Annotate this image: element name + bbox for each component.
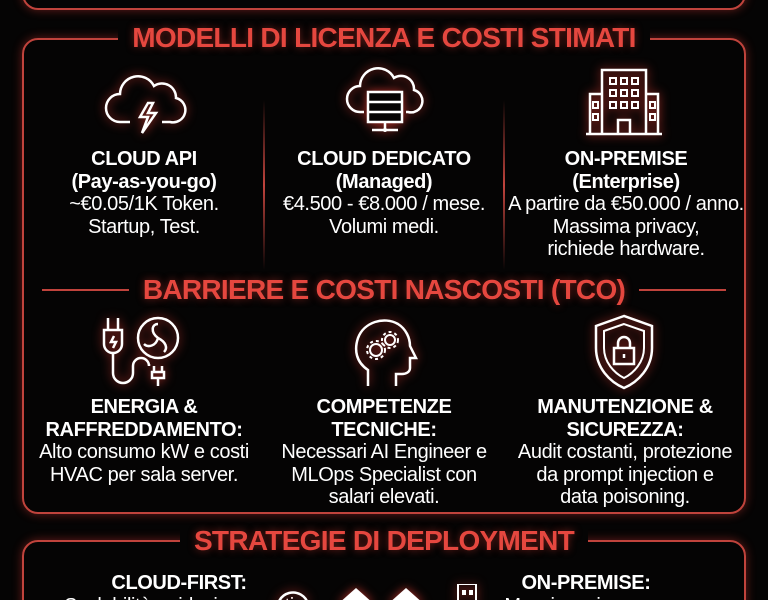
text: energia: ENERGIA & [91,396,197,418]
text: competenze: COMPETENZE [317,396,451,418]
text: on-premise strategy: ON-PREMISE: [522,572,650,594]
text: manutenzione: data poisoning. [560,486,690,508]
text: cloud dedicato: CLOUD DEDICATO [297,148,471,170]
text: cloud api: ~€0.05/1K Token. [69,193,219,215]
text: cloud dedicato: (Managed) [336,170,432,192]
text: manutenzione: da prompt injection e [536,464,714,486]
heading: strategie: STRATEGIE DI DEPLOYMENT [194,525,574,556]
text: competenze: TECNICHE: [331,418,437,440]
text: on-premise: Massima privacy, [553,216,699,238]
icon: deployment arrows [272,579,484,600]
panel: licensing and barriers [22,38,746,514]
text: cloud api: CLOUD API [91,148,197,170]
text: energia: RAFFREDDAMENTO: [46,418,242,440]
text: manutenzione: MANUTENZIONE & [537,396,713,418]
text: cloud dedicato: Volumi medi. [329,216,439,238]
text: energia: Alto consumo kW e costi [39,441,249,463]
text: cloud api: Startup, Test. [88,216,200,238]
text: cloud api [69,148,219,238]
text: on-premise: A partire da €50.000 / anno. [508,193,744,215]
text: on-premise: ON-PREMISE [565,148,687,170]
text: cloud-first: CLOUD-FIRST: [111,572,247,594]
text: manutenzione [518,396,732,508]
text: manutenzione: SICUREZZA: [566,418,684,440]
icon: head gears [348,312,422,389]
text: on-premise: richiede hardware. [547,238,705,260]
text: cloud api: (Pay-as-you-go) [71,170,217,192]
panel: deployment [22,540,746,600]
text: energia [39,396,249,486]
text: competenze: MLOps Specialist con [291,464,477,486]
text: on-premise [508,148,744,260]
text: competenze: Necessari AI Engineer e [281,441,487,463]
text: competenze [281,396,487,508]
heading: modelli di licenza: MODELLI DI LICENZA E COSTI STIMATI [132,22,636,53]
text: cloud dedicato [283,148,485,238]
text: energia: HVAC per sala server. [50,464,238,486]
text: on-premise: (Enterprise) [572,170,680,192]
text: cloud dedicato: €4.500 - €8.000 / mese. [283,193,485,215]
text: cloud-first [64,572,294,600]
icon: shield lock [588,309,660,395]
icon: plug and fan [96,310,186,390]
icon: cloud server [340,60,430,138]
text: competenze: salari elevati. [329,486,439,508]
top panel edge [22,0,746,10]
text: on-premise strategy [504,572,668,600]
heading: barriere: BARRIERE E COSTI NASCOSTI (TCO) [143,274,625,305]
icon: building [581,62,667,142]
text: manutenzione: Audit costanti, protezione [518,441,732,463]
icon: cloud lightning [98,68,193,138]
